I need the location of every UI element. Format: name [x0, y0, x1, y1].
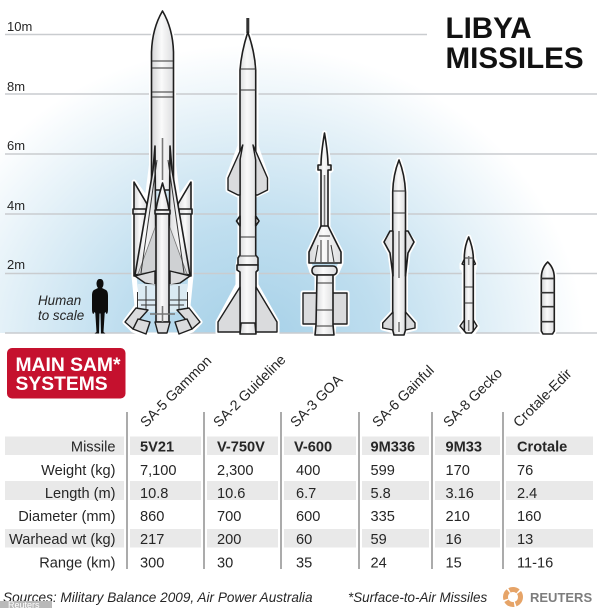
column: SA-3 values: 60 [296, 532, 312, 548]
column: SA-6 values: 599 [370, 463, 395, 479]
SA-2 booster fins [218, 287, 240, 332]
title [446, 12, 584, 75]
SA-3 wings [309, 226, 341, 263]
SA-5 forward body [152, 11, 174, 190]
column: SA-5 values [140, 440, 177, 572]
column: SA-6 values [370, 440, 415, 572]
SA-2 control fins [236, 216, 240, 226]
column: Crotale values [517, 440, 567, 572]
column: SA-3 values: 600 [296, 509, 320, 525]
icon: human silhouette [92, 279, 108, 334]
column: SA-2 values: V-750V [217, 440, 265, 456]
SA-2 nose probe [246, 18, 249, 33]
column: SA-3 values: 6.7 [296, 486, 316, 502]
column: SA-8 values: 16 [446, 532, 462, 548]
Crotale body [541, 262, 554, 334]
SA-6 rear fins [383, 312, 415, 330]
row labels: Missile [71, 440, 116, 456]
missile: SA-8 Gecko [460, 237, 477, 333]
column: SA-8 values: 170 [446, 463, 470, 479]
Reuters wordmark: REUTERS [530, 590, 592, 605]
SA-2 body [238, 32, 258, 265]
Crotale rings [541, 278, 554, 322]
missile name headers: SA-5 Gammon [138, 353, 215, 431]
column: SA-2 values: 10.6 [217, 486, 245, 502]
SA-8 rear fins [460, 320, 477, 331]
row labels: Diameter (mm) [18, 509, 116, 525]
column: SA-3 values: V-600 [294, 440, 332, 456]
column: SA-3 values: 400 [296, 463, 320, 479]
missile name headers: SA-2 Guideline [211, 352, 289, 431]
column: SA-5 values: 300 [140, 556, 164, 572]
callout: main SAM systems [7, 348, 126, 398]
row labels: Warhead wt (kg) [9, 532, 116, 548]
scale labels: 4m [7, 198, 25, 213]
watermark [0, 600, 52, 608]
column: SA-5 values: 7,100 [140, 463, 177, 479]
SA-8 body [464, 237, 473, 333]
missile: SA-5 Gammon [125, 11, 200, 335]
column: SA-6 values: 24 [370, 556, 387, 572]
SA-2 booster [237, 265, 258, 325]
column: SA-2 values: 200 [217, 532, 241, 548]
column: SA-8 values: 210 [446, 509, 470, 525]
column: SA-8 values: 15 [446, 556, 462, 572]
column: SA-6 values: 5.8 [370, 486, 391, 502]
column: Crotale values: Crotale [517, 440, 567, 456]
column: SA-5 values: 217 [140, 532, 164, 548]
row bands [5, 436, 593, 548]
SA-2 wings [228, 145, 243, 195]
missile: SA-6 Gainful [383, 160, 415, 335]
SA-6 ramjet intakes [384, 231, 414, 276]
human to scale label: Human [38, 293, 81, 308]
column: SA-2 values [217, 440, 265, 572]
chart background [0, 35, 600, 333]
scale labels: 2m [7, 257, 25, 272]
missile: SA-3 GOA [303, 133, 347, 335]
missile name headers [138, 352, 576, 431]
column: SA-5 values: 10.8 [140, 486, 168, 502]
SA-3 collar [312, 266, 337, 275]
SA-5 rear core [150, 138, 175, 333]
scale lines [5, 34, 597, 333]
column separators [127, 412, 503, 569]
row labels: Weight (kg) [41, 463, 116, 479]
column: SA-3 values [294, 440, 332, 572]
missile name headers: SA-3 GOA [288, 372, 347, 431]
missile: Crotale-Edir [541, 262, 554, 334]
SA-2 nozzle [240, 323, 256, 334]
callout: main SAM systems: SYSTEMS [16, 374, 108, 395]
footnote: *Surface-to-Air Missiles [348, 590, 487, 605]
column: Crotale values: 11-16 [517, 556, 553, 572]
SA-3 booster fins [303, 293, 347, 324]
column: SA-5 values: 5V21 [140, 440, 174, 456]
missile name headers: SA-8 Gecko [441, 365, 506, 431]
missile name headers: Crotale-Edir [511, 366, 576, 431]
scale labels: 10m [7, 19, 32, 34]
column: Crotale values: 13 [517, 532, 533, 548]
column: SA-8 values [446, 440, 482, 572]
scale labels: 8m [7, 79, 25, 94]
data table [5, 412, 593, 572]
row labels: Length (m) [45, 486, 116, 502]
column: Crotale values: 160 [517, 509, 541, 525]
column: SA-2 values: 700 [217, 509, 241, 525]
title: MISSILES [446, 42, 584, 75]
missile name headers: SA-6 Gainful [370, 363, 438, 431]
column: SA-6 values: 59 [370, 532, 387, 548]
column: SA-3 values: 35 [296, 556, 312, 572]
column: Crotale values: 2.4 [517, 486, 537, 502]
missile: SA-2 Guideline [218, 18, 277, 334]
row labels [9, 440, 116, 572]
callout: main SAM systems: MAIN SAM* [16, 355, 121, 376]
column: SA-6 values: 9M336 [370, 440, 415, 456]
icon: Reuters logo [506, 590, 520, 604]
column: SA-8 values: 3.16 [446, 486, 474, 502]
column: SA-2 values: 30 [217, 556, 233, 572]
SA-3 booster [315, 275, 334, 335]
column: SA-5 values: 860 [140, 509, 164, 525]
SA-5 right booster assembly [168, 146, 200, 334]
sources note: Sources: Military Balance 2009, Air Power Australia [3, 590, 313, 605]
SA-8 front fins [462, 259, 476, 265]
SA-6 body [393, 160, 406, 335]
column: Crotale values: 76 [517, 463, 533, 479]
SA-3 upper stage [318, 133, 331, 230]
column: SA-8 values: 9M33 [446, 440, 482, 456]
human to scale label: to scale [38, 308, 84, 323]
column: SA-6 values: 335 [370, 509, 395, 525]
human to scale label [38, 293, 84, 323]
column: SA-2 values: 2,300 [217, 463, 254, 479]
scale labels [7, 19, 32, 272]
title: LIBYA [446, 12, 532, 45]
scale labels: 6m [7, 138, 25, 153]
row labels: Range (km) [39, 556, 116, 572]
SA-5 left booster assembly [125, 146, 157, 334]
